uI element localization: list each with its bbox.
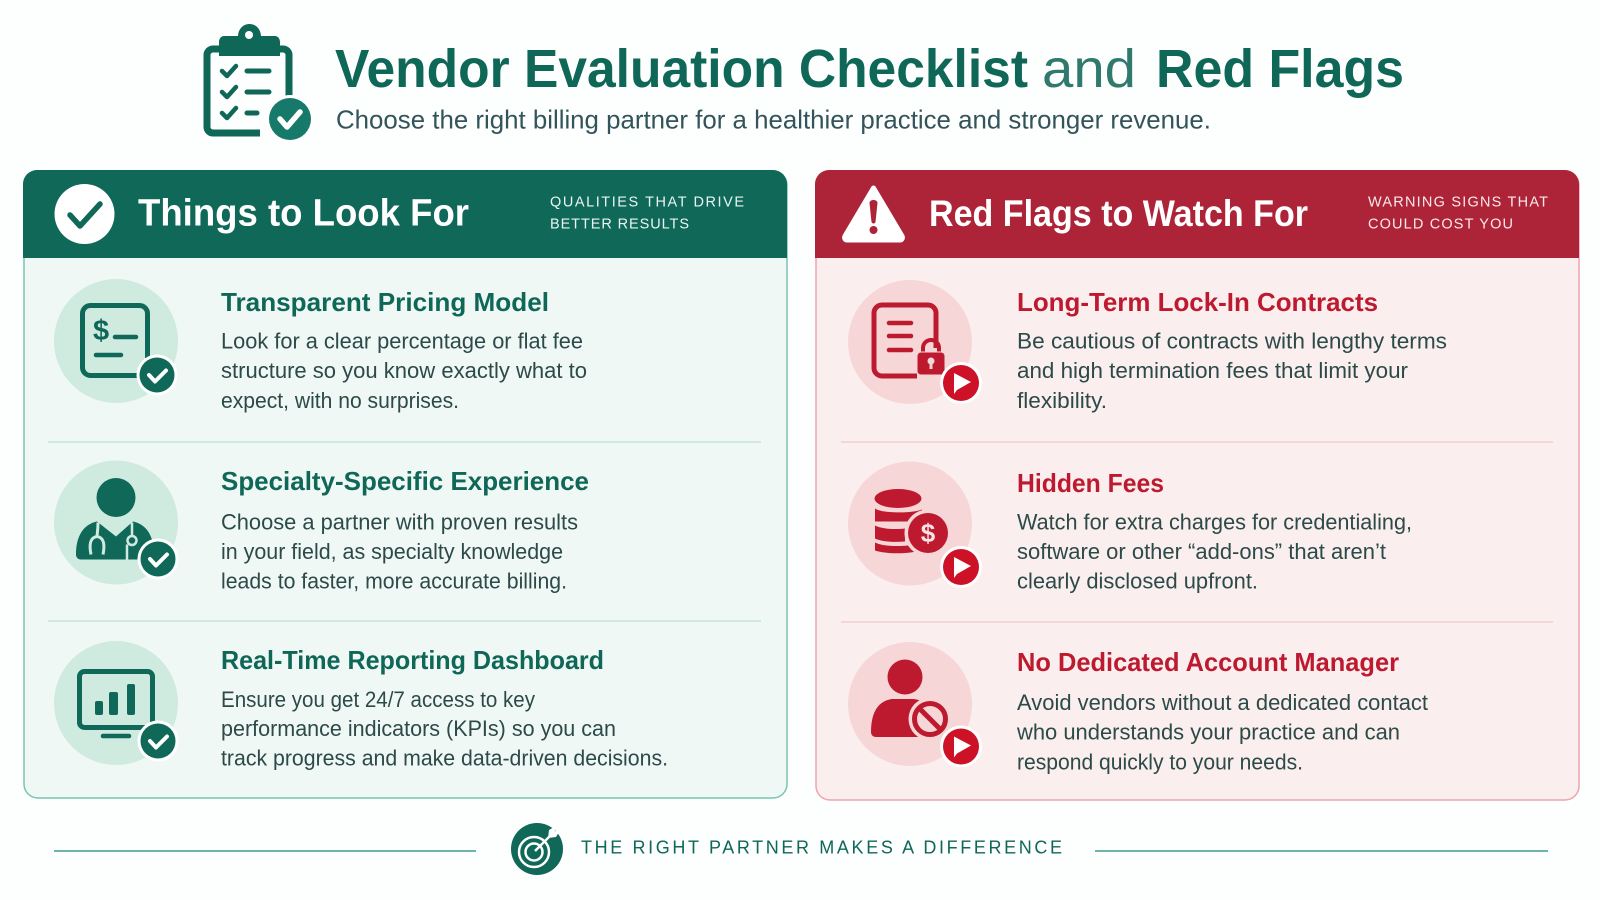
body text: performance indicators (KPIs) so you can: [221, 716, 616, 741]
icon: pricing document: [54, 279, 178, 403]
panel heading: Things to Look For: [138, 192, 469, 234]
item: lock-in contracts: [848, 280, 1447, 413]
body text: [1017, 328, 1447, 413]
icon: dashboard monitor: [54, 641, 178, 765]
panel subheading: [550, 194, 744, 232]
panel background: [24, 171, 787, 798]
item: transparent pricing: [54, 279, 587, 413]
body text: [221, 510, 578, 594]
body text: track progress and make data-driven decisions.: [221, 746, 668, 770]
icon: target: [511, 823, 563, 875]
item: hidden fees: [848, 462, 1412, 594]
panel: things to look for: [23, 170, 787, 798]
body text: Be cautious of contracts with lengthy terms: [1017, 328, 1447, 354]
icon: person with prohibited sign: [848, 642, 982, 768]
title: Red Flags: [1156, 39, 1404, 99]
body text: respond quickly to your needs.: [1017, 750, 1303, 774]
body text: in your field, as specialty knowledge: [221, 539, 563, 564]
panel subheading: BETTER RESULTS: [550, 216, 689, 232]
heading: Hidden Fees: [1017, 468, 1164, 498]
icon: doctor: [54, 460, 178, 584]
body text: Ensure you get 24/7 access to key: [221, 687, 535, 712]
icon: locked contract: [848, 280, 982, 404]
panel header: [815, 170, 1579, 258]
body text: [221, 328, 587, 413]
item: no account manager: [848, 642, 1428, 774]
body text: [1017, 510, 1412, 594]
body text: flexibility.: [1017, 388, 1107, 413]
heading: Specialty-Specific Experience: [221, 466, 589, 496]
heading: Transparent Pricing Model: [221, 287, 549, 317]
heading: Long-Term Lock-In Contracts: [1017, 287, 1378, 317]
panel heading: Red Flags to Watch For: [929, 193, 1308, 234]
body text: and high termination fees that limit your: [1017, 358, 1408, 383]
panel subheading: WARNING SIGNS THAT: [1368, 194, 1548, 210]
subtitle: Choose the right billing partner for a healthier practice and stronger revenue.: [336, 104, 1211, 134]
icon: warning triangle: [845, 188, 902, 240]
icon: clipboard with check: [207, 24, 314, 143]
title: [335, 39, 1404, 99]
icon: coins with dollar: $: [921, 518, 936, 548]
panel subheading: COULD COST YOU: [1368, 216, 1513, 232]
body text: Look for a clear percentage or flat fee: [221, 328, 583, 354]
body text: structure so you know exactly what to: [221, 358, 587, 383]
body text: leads to faster, more accurate billing.: [221, 568, 567, 594]
heading: Real-Time Reporting Dashboard: [221, 645, 604, 675]
body text: Choose a partner with proven results: [221, 510, 578, 534]
body text: [1016, 690, 1428, 774]
body text: clearly disclosed upfront.: [1017, 568, 1258, 594]
icon: coins with dollar: [848, 462, 982, 588]
panel background: [816, 171, 1579, 800]
icon: pricing document: $: [93, 315, 109, 347]
item: reporting dashboard: [54, 641, 668, 770]
icon: check circle: [54, 184, 114, 244]
body text: Watch for extra charges for credentialing,: [1017, 510, 1412, 534]
body text: [221, 687, 668, 770]
body text: software or other “add-ons” that aren’t: [1017, 539, 1386, 564]
body text: expect, with no surprises.: [221, 388, 459, 413]
item: specialty experience: [54, 460, 589, 594]
body text: Avoid vendors without a dedicated contact: [1017, 690, 1428, 715]
panel header: [23, 170, 787, 258]
panel: red flags: [815, 170, 1579, 800]
panel subheading: QUALITIES THAT DRIVE: [550, 194, 744, 210]
footer tagline: THE RIGHT PARTNER MAKES A DIFFERENCE: [581, 838, 1062, 858]
panel subheading: [1368, 194, 1548, 232]
body text: who understands your practice and can: [1016, 720, 1400, 744]
title: and: [1042, 39, 1136, 99]
heading: No Dedicated Account Manager: [1017, 647, 1399, 677]
footer: [54, 823, 1548, 875]
title: Vendor Evaluation Checklist: [335, 39, 1028, 99]
